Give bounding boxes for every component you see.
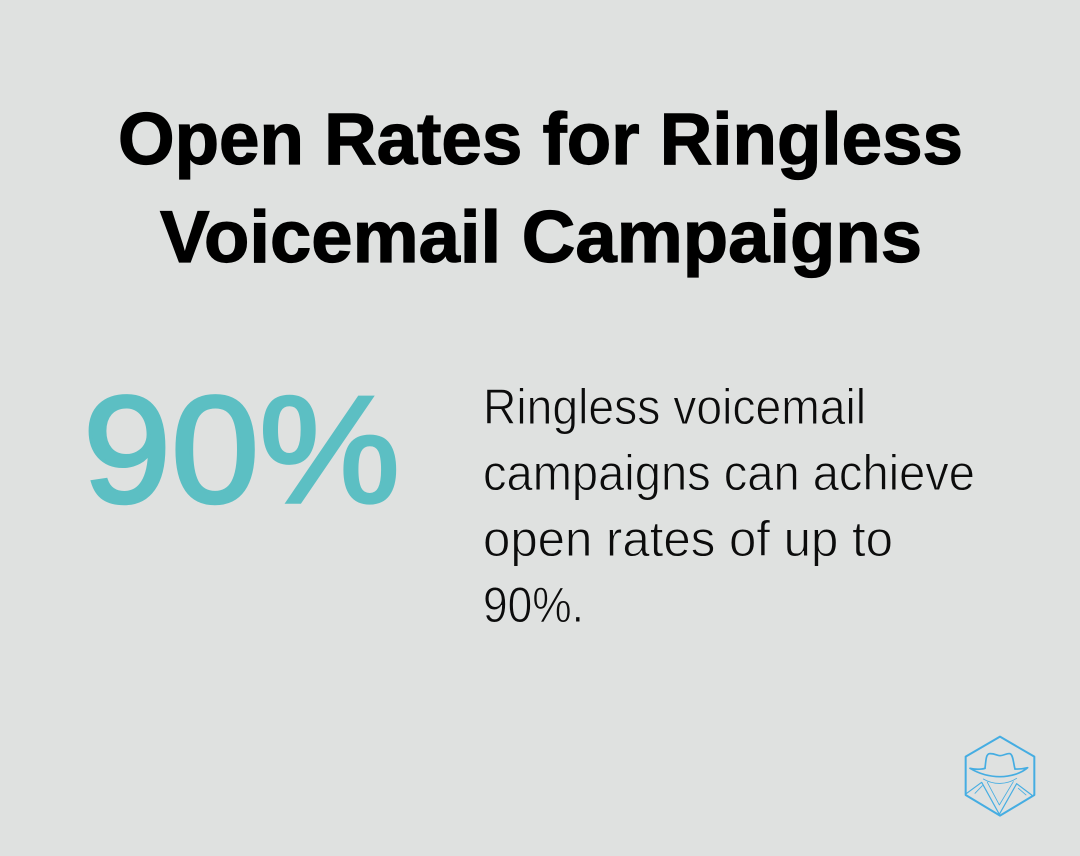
description text: 90%. [483, 577, 584, 633]
icon: logo, hexagon with hat and coat [966, 737, 1034, 816]
description text [483, 379, 975, 633]
description text: open rates of up to [483, 511, 893, 567]
description text: Ringless voicemail [483, 379, 866, 435]
description text: campaigns can achieve [483, 445, 975, 501]
title: Voicemail Campaigns [160, 197, 922, 278]
title: Open Rates for Ringless [118, 99, 963, 180]
big stat: 90%: 90% [83, 365, 400, 535]
title [118, 99, 963, 278]
